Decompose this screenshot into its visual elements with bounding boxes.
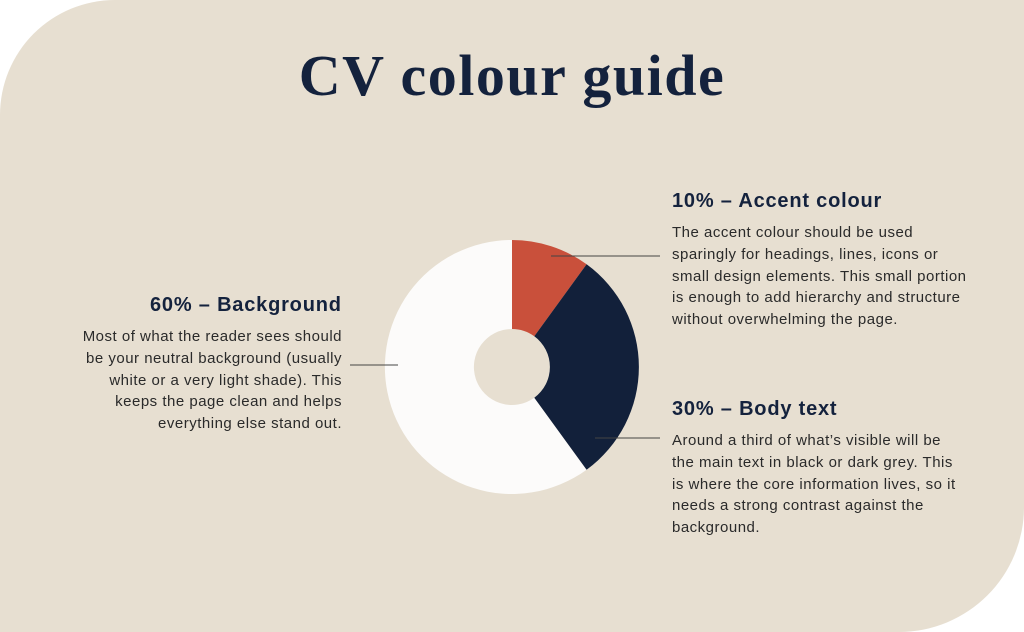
heading: 10% accent: 10% – Accent colour bbox=[672, 190, 882, 212]
text: background: everything else stand out. bbox=[158, 415, 342, 432]
text: accent: The accent colour should be used bbox=[672, 224, 913, 241]
text: accent bbox=[672, 224, 967, 328]
title: CV colour guide bbox=[299, 43, 725, 108]
segment: background 60% bbox=[385, 240, 587, 494]
text: accent: small design elements. This small portion bbox=[672, 268, 967, 285]
heading: 30% body text: 30% – Body text bbox=[672, 398, 837, 420]
text: background: white or a very light shade). This bbox=[109, 372, 342, 389]
text: body bbox=[672, 432, 956, 536]
segment: body text 30% bbox=[534, 264, 639, 470]
text: body: is where the core information lives, so it bbox=[672, 476, 956, 493]
text: accent: without overwhelming the page. bbox=[672, 311, 898, 328]
segment: accent 10% bbox=[512, 240, 587, 336]
text: body: background. bbox=[672, 519, 760, 536]
text: accent: sparingly for headings, lines, icons or bbox=[672, 246, 938, 263]
text: background: be your neutral background (usually bbox=[86, 350, 342, 367]
heading: 60% background: 60% – Background bbox=[150, 294, 342, 316]
text: background: keeps the page clean and helps bbox=[115, 393, 342, 410]
text: body: Around a third of what’s visible will be bbox=[672, 432, 941, 449]
text: body: needs a strong contrast against the bbox=[672, 497, 924, 514]
text: accent: is enough to add hierarchy and structure bbox=[672, 289, 960, 306]
text: body: the main text in black or dark grey. This bbox=[672, 454, 953, 471]
text: background bbox=[83, 328, 342, 432]
leader lines bbox=[350, 256, 660, 438]
text: background: Most of what the reader sees should bbox=[83, 328, 342, 345]
